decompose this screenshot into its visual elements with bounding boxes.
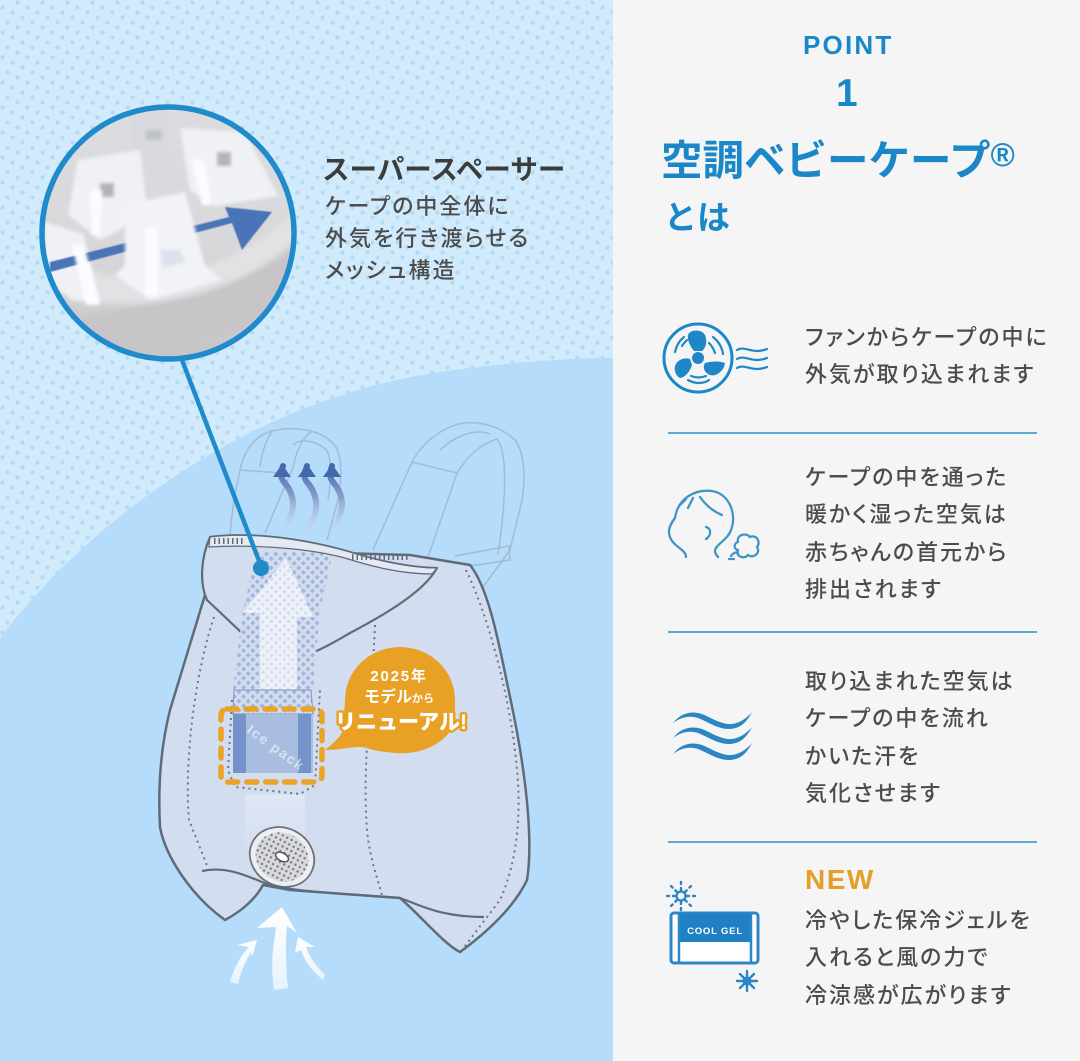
ice pack <box>233 690 313 774</box>
label: NEW: NEW <box>805 864 875 895</box>
stitching lines <box>188 570 519 950</box>
text: fan description: ファンからケープの中に <box>805 325 1049 350</box>
divider <box>668 841 1037 843</box>
ice pack label: Ice pack <box>244 721 308 774</box>
icon: baby breathing <box>668 490 760 560</box>
intake air arrows <box>230 907 325 990</box>
icon: waves <box>673 712 752 760</box>
rising warm air arrows <box>281 466 342 530</box>
icon: cool gel pack: COOL GEL <box>687 926 743 937</box>
text: super spacer description <box>325 194 530 283</box>
text: super spacer description: メッシュ構造 <box>325 258 457 283</box>
orange dashed highlight <box>221 709 322 782</box>
text: warm air description: ケープの中を通った <box>805 465 1008 490</box>
air channel mesh <box>233 552 333 690</box>
callout: 2025 renewal <box>325 647 467 753</box>
panel: left illustration <box>0 0 613 1061</box>
blue arrow through pillars <box>50 207 272 272</box>
text: cool gel description: 入れると風の力で <box>805 945 990 970</box>
hood <box>202 535 437 659</box>
text: sweat evaporation description: 取り込まれた空気は <box>805 669 1015 694</box>
text: super spacer description: ケープの中全体に <box>325 194 511 219</box>
back mesh pillars <box>45 112 278 302</box>
text: sweat evaporation description: ケープの中を流れ <box>805 706 990 731</box>
text: cool gel description: 冷涼感が広がります <box>805 983 1013 1008</box>
carrier straps <box>230 423 524 587</box>
magnifier ring <box>42 107 294 359</box>
leader line <box>182 360 269 576</box>
callout: 2025 renewal: 2025年 <box>370 667 428 685</box>
magnifier lens photo <box>44 110 292 356</box>
blue curved background <box>0 358 613 1061</box>
title suffix: とは <box>664 199 730 236</box>
text: fan description: 外気が取り込まれます <box>805 362 1035 387</box>
front mesh pillar <box>115 192 222 300</box>
text: super spacer description: 外気を行き渡らせる <box>325 226 530 251</box>
divider <box>668 631 1037 633</box>
icon: cool gel pack <box>666 880 760 992</box>
text: fan description <box>805 325 1049 387</box>
icon: fan with wind <box>662 322 768 394</box>
text: warm air description: 排出されます <box>805 577 943 602</box>
callout: 2025 renewal: リニューアル! <box>335 711 467 734</box>
carrier lower flap lines <box>202 870 484 917</box>
text: sweat evaporation description <box>805 669 1015 806</box>
text: cool gel description: 冷やした保冷ジェルを <box>805 908 1032 933</box>
fan unit <box>239 816 325 898</box>
text: sweat evaporation description: 気化させます <box>805 781 942 806</box>
text: warm air description <box>805 465 1008 602</box>
heading: point 1: POINT <box>803 30 893 60</box>
heading: super spacer: スーパースペーサー <box>322 154 565 185</box>
heading: number 1: 1 <box>836 72 858 115</box>
text: sweat evaporation description: かいた汗を <box>805 744 920 769</box>
callout: 2025 renewal: モデルから <box>364 687 434 706</box>
text: warm air description: 赤ちゃんの首元から <box>805 540 1008 565</box>
carrier body <box>159 550 529 952</box>
big airflow arrow <box>243 558 313 850</box>
text: cool gel description <box>805 908 1032 1008</box>
title: 空調ベビーケープ® <box>661 136 1015 184</box>
text: warm air description: 暖かく湿った空気は <box>805 502 1008 527</box>
divider <box>668 432 1037 434</box>
